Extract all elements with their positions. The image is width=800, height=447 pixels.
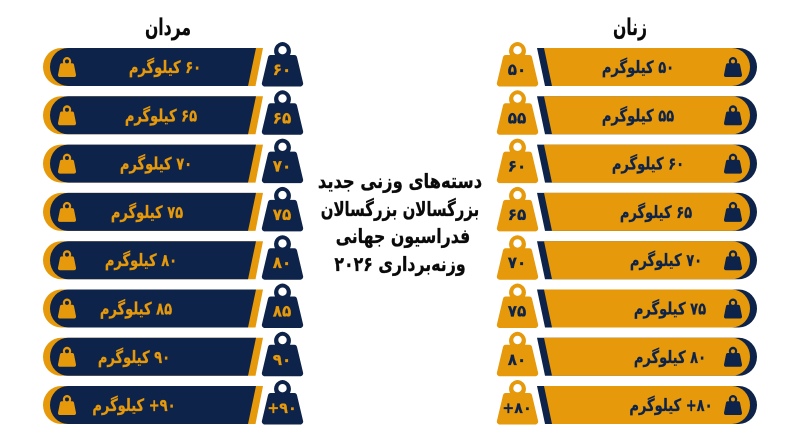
women row 50 kg — [497, 42, 757, 87]
women row 55 kg: ۵۵ — [508, 109, 527, 127]
men row 90+ kg: ۹۰+ — [267, 400, 297, 417]
men row 75 kg: ۷۵ — [273, 206, 292, 224]
women row 55 kg — [497, 90, 757, 135]
men row 75 kg — [43, 187, 303, 231]
women row 80 kg — [497, 332, 757, 376]
men row 70 kg: ۷۰ کیلوگرم — [120, 154, 192, 174]
center title — [318, 171, 482, 277]
women row 70 kg — [497, 235, 757, 280]
women row 60 kg: ۶۰ کیلوگرم — [612, 154, 684, 174]
women row 80+ kg — [497, 380, 757, 425]
center title: فدراسیون جهانی — [336, 225, 470, 249]
women row 60 kg — [497, 139, 757, 183]
heading: men: مردان — [145, 14, 191, 41]
men row 85 kg: ۸۵ کیلوگرم — [100, 299, 172, 319]
women row 75 kg: ۷۵ کیلوگرم — [634, 299, 706, 319]
men row 60 kg — [43, 42, 303, 87]
women row 65 kg: ۶۵ — [508, 206, 527, 224]
men row 90 kg: ۹۰ کیلوگرم — [98, 347, 170, 367]
men row 70 kg: ۷۰ — [273, 157, 291, 176]
men row 65 kg — [43, 90, 303, 135]
men row 80 kg: ۸۰ کیلوگرم — [105, 251, 177, 271]
men row 60 kg: ۶۰ کیلوگرم — [129, 57, 201, 77]
men row 85 kg — [43, 284, 303, 328]
men row 75 kg: ۷۵ کیلوگرم — [111, 202, 183, 222]
men row 90 kg: ۹۰ — [273, 350, 291, 369]
women row 75 kg — [497, 284, 757, 328]
men row 70 kg — [43, 139, 303, 183]
men row 90+ kg: ۹۰+ کیلوگرم — [92, 395, 176, 415]
women row 65 kg: ۶۵ کیلوگرم — [620, 202, 692, 222]
center title: دسته‌های وزنی جدید — [318, 171, 482, 193]
men row 90+ kg — [43, 380, 303, 425]
heading: women: زنان — [613, 14, 647, 41]
women row 75 kg: ۷۵ — [508, 302, 527, 321]
men row 60 kg: ۶۰ — [273, 61, 291, 79]
center title: بزرگسالان بزرگسالان — [321, 197, 479, 222]
women row 70 kg: ۷۰ کیلوگرم — [630, 251, 702, 271]
women row 50 kg: ۵۰ — [508, 61, 526, 79]
women row 65 kg — [497, 187, 757, 231]
women row 50 kg: ۵۰ کیلوگرم — [602, 57, 674, 77]
women row 80 kg: ۸۰ کیلوگرم — [634, 347, 706, 367]
men row 65 kg: ۶۵ — [273, 109, 292, 127]
center title: وزنه‌برداری ۲۰۲۶ — [334, 253, 466, 277]
women row 80+ kg: ۸۰+ کیلوگرم — [629, 395, 713, 415]
women row 80+ kg: ۸۰+ — [502, 400, 532, 417]
women row 80 kg: ۸۰ — [508, 350, 526, 369]
men row 65 kg: ۶۵ کیلوگرم — [125, 106, 197, 126]
women row 60 kg: ۶۰ — [508, 157, 526, 176]
men row 80 kg: ۸۰ — [273, 254, 291, 272]
men row 90 kg — [43, 332, 303, 376]
men row 85 kg: ۸۵ — [273, 302, 292, 321]
women row 70 kg: ۷۰ — [508, 254, 526, 272]
women row 55 kg: ۵۵ کیلوگرم — [602, 106, 674, 126]
men row 80 kg — [43, 235, 303, 280]
